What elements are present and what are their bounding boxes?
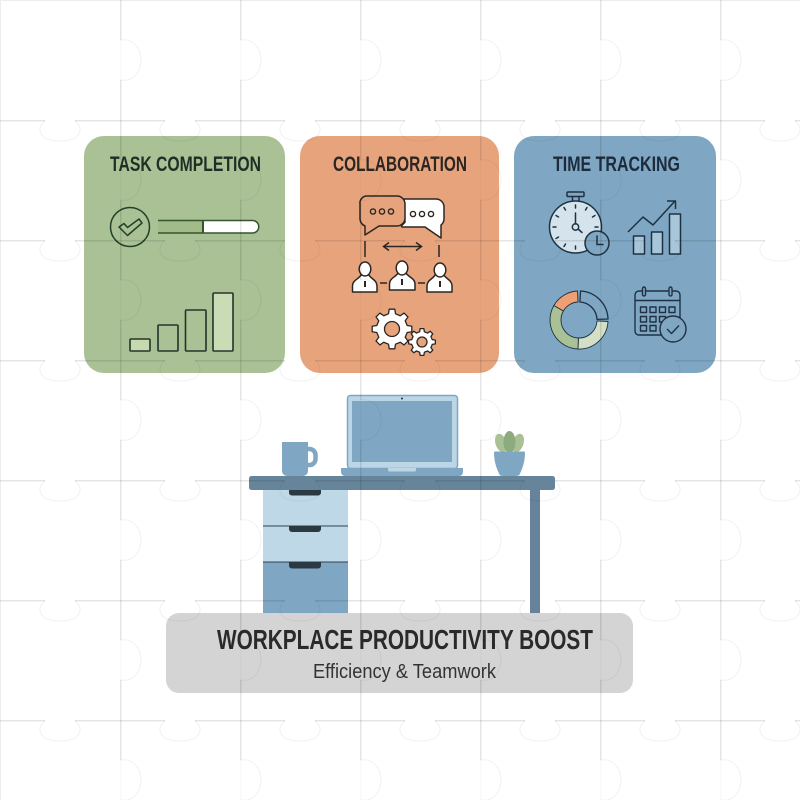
heading: time tracking: TIME TRACKING [553, 153, 680, 176]
desk top [249, 476, 555, 490]
icon: speech bubbles [360, 196, 444, 238]
icon: mug [282, 442, 316, 476]
heading: collaboration: COLLABORATION [333, 153, 467, 176]
banner: footer title [166, 613, 633, 693]
icon: growth chart [628, 201, 680, 254]
heading: main title: WORKPLACE PRODUCTIVITY BOOST [217, 624, 593, 655]
progress bar [158, 220, 259, 233]
filing cabinet [263, 490, 348, 614]
panel: collaboration [300, 136, 499, 373]
icon: check circle [110, 208, 150, 246]
laptop [341, 396, 463, 476]
icon: team of three people [352, 261, 452, 292]
icon: gears [372, 309, 435, 355]
subtitle: Efficiency & Teamwork [313, 660, 497, 683]
panel: time tracking [514, 136, 716, 373]
bar chart [130, 293, 233, 351]
heading: task completion: TASK COMPLETION [110, 153, 261, 176]
icon: connectors and arrow [365, 241, 439, 283]
desk leg [530, 488, 540, 614]
icon: stopwatch [550, 192, 609, 255]
panel: task completion [84, 136, 285, 373]
icon: calendar with check [635, 287, 686, 342]
icon: potted plant [493, 431, 526, 476]
illustration: desk scene [249, 396, 555, 614]
donut chart [550, 291, 608, 349]
